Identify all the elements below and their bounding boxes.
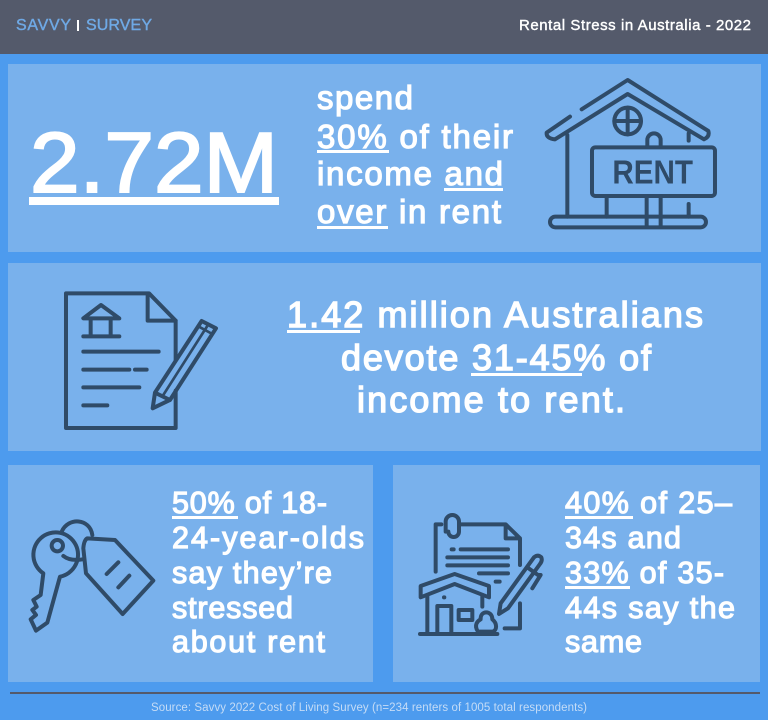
brand logo: SURVEY — [86, 17, 152, 34]
statistic text: income to rent. — [357, 379, 625, 420]
icon: house with rent sign — [547, 80, 715, 227]
headline text: spend — [317, 79, 413, 116]
panel: 1.42 million — [8, 263, 761, 451]
headline text: over in rent — [317, 193, 501, 230]
headline text: income and — [317, 155, 503, 192]
statistic text: 24-year-olds — [172, 521, 364, 555]
icon: house with rent sign: RENT — [612, 154, 693, 191]
brand logo — [16, 17, 152, 34]
statistic text: stressed — [172, 591, 293, 625]
panel: 25-44 year olds — [393, 465, 760, 682]
headline text: 30% of their — [317, 118, 513, 155]
statistic text: 34s and — [565, 521, 681, 555]
icon: house, document and pen — [420, 515, 542, 634]
statistic text: about rent — [172, 625, 326, 659]
header title: Rental Stress in Australia - 2022 — [519, 17, 751, 34]
statistic text: 40% of 25– — [565, 486, 732, 520]
statistic text — [565, 486, 735, 659]
source footnote: Source: Savvy 2022 Cost of Living Survey (n=234 renters of 1005 total respondents) — [151, 702, 587, 714]
statistic text: say they’re — [172, 556, 332, 590]
big number: 2.72M — [30, 116, 278, 211]
icon: document and pencil — [66, 293, 216, 428]
statistic text: 44s say the — [565, 591, 735, 625]
statistic text: 1.42 million Australians — [287, 294, 703, 335]
header bar — [0, 0, 768, 54]
statistic text — [287, 294, 703, 420]
statistic text — [172, 486, 364, 659]
panel: 18-24 year olds — [8, 465, 373, 682]
statistic text: 50% of 18- — [172, 486, 327, 520]
panel: 2.72M headline — [8, 64, 761, 252]
brand logo: SAVVY — [16, 17, 71, 34]
statistic text: 33% of 35- — [565, 556, 724, 590]
statistic text: devote 31-45% of — [341, 337, 652, 378]
headline text — [317, 79, 513, 230]
icon: keys with tag — [31, 521, 153, 631]
statistic text: same — [565, 625, 642, 659]
